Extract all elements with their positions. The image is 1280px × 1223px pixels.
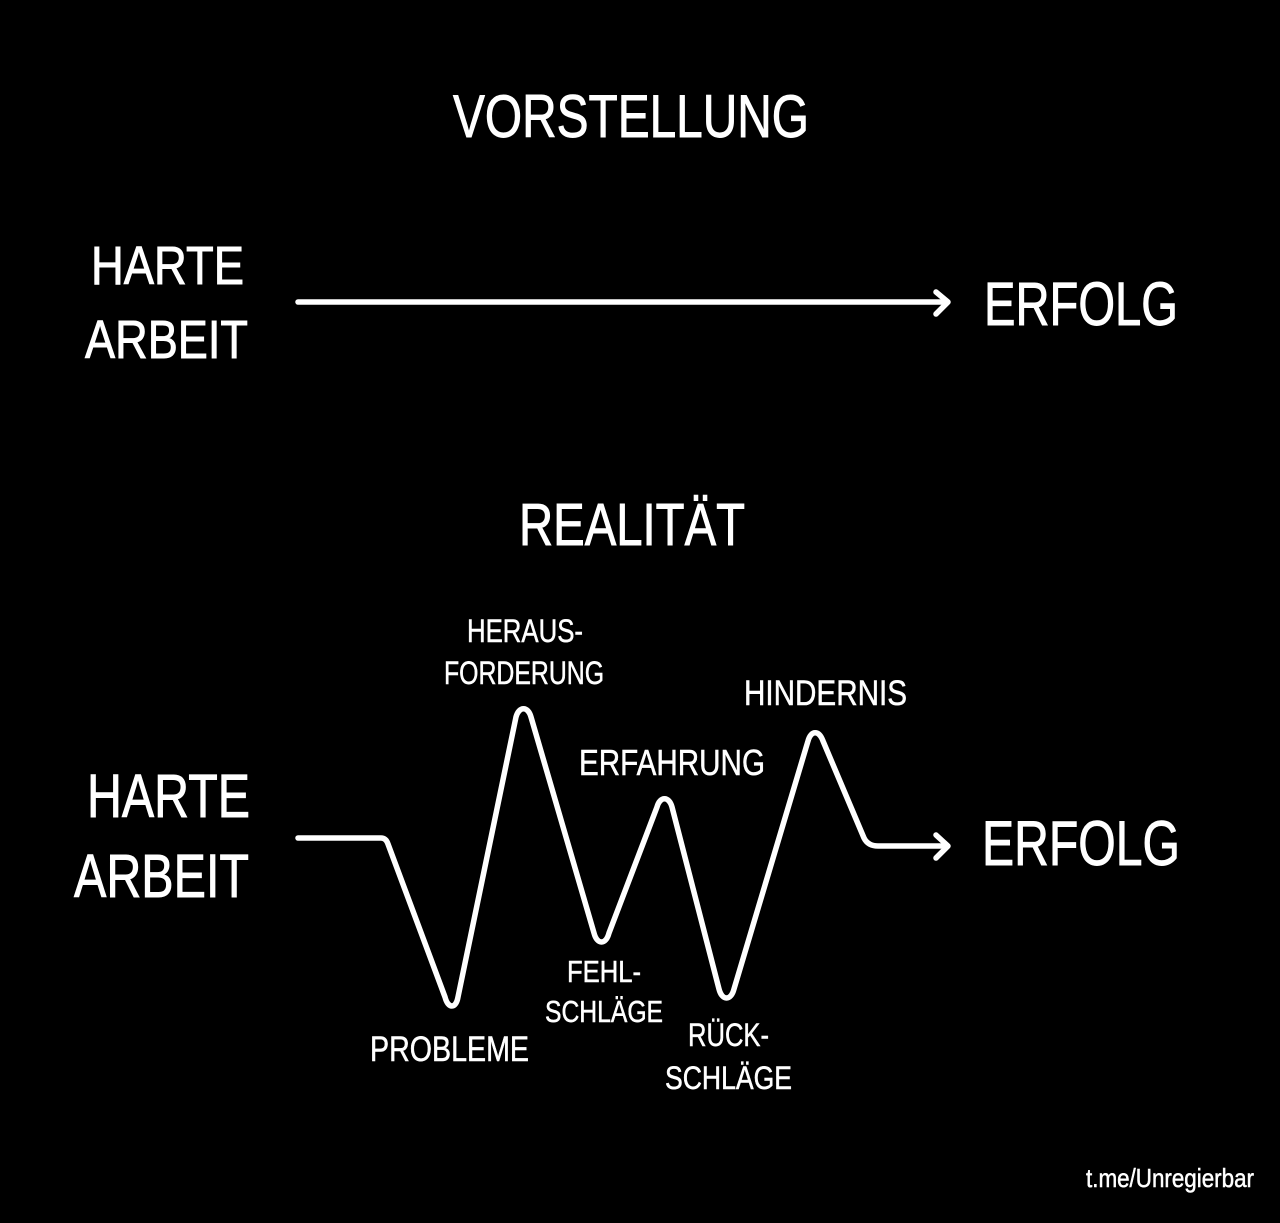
label: Probleme: PROBLEME: [370, 1030, 529, 1069]
label: Fehlschläge: SCHLÄGE: [545, 994, 663, 1029]
label: Rückschläge: RÜCK-: [688, 1017, 769, 1053]
label: Fehlschläge: [545, 954, 663, 1029]
label: Rückschläge: [665, 1017, 792, 1096]
label: Fehlschläge: FEHL-: [567, 954, 641, 989]
label: Erfahrung: ERFAHRUNG: [579, 742, 765, 783]
arrow: winding path: [298, 709, 948, 1006]
label: Harte Arbeit (bottom): HARTE: [87, 762, 250, 830]
label: Harte Arbeit (bottom): [74, 762, 250, 910]
arrow: straight path: [298, 292, 948, 314]
label: Harte Arbeit (top): ARBEIT: [85, 310, 248, 370]
title: Vorstellung: VORSTELLUNG: [453, 83, 809, 150]
label: Erfolg (top): ERFOLG: [984, 270, 1178, 338]
label: Harte Arbeit (top): HARTE: [91, 236, 244, 296]
label: Rückschläge: SCHLÄGE: [665, 1060, 792, 1096]
label: Herausforderung: FORDERUNG: [444, 655, 604, 691]
label: Erfolg (bottom): ERFOLG: [982, 809, 1180, 879]
label: Herausforderung: [444, 613, 604, 691]
label: Hindernis: HINDERNIS: [744, 674, 907, 713]
label: Harte Arbeit (bottom): ARBEIT: [74, 842, 249, 910]
title: Realität: REALITÄT: [519, 492, 745, 558]
label: Herausforderung: HERAUS-: [467, 613, 583, 649]
label: Harte Arbeit (top): [85, 236, 248, 370]
credit: t.me/Unregierbar: [1086, 1163, 1254, 1193]
